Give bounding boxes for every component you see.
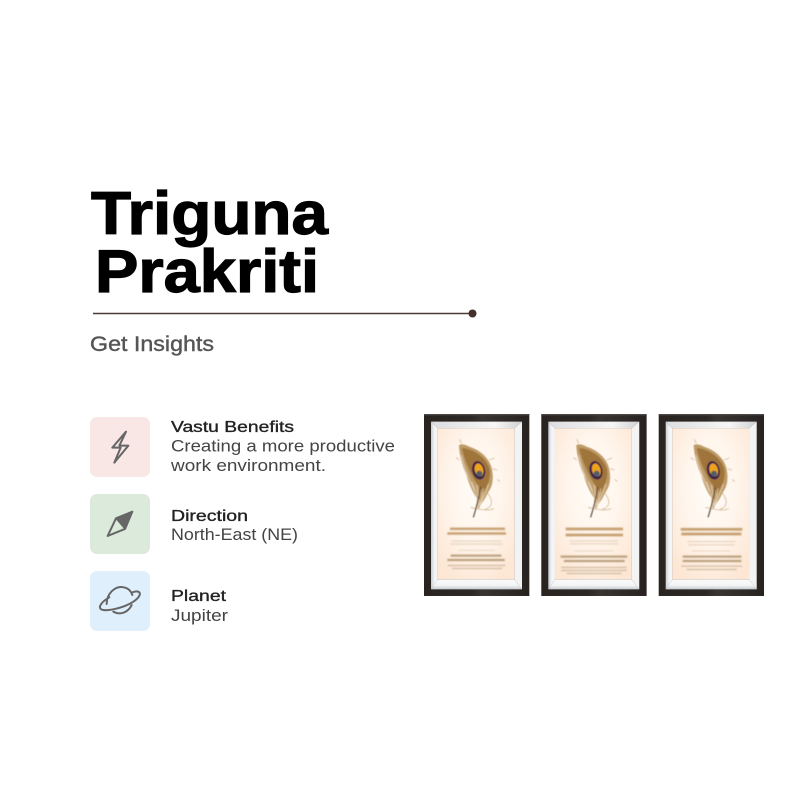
divider line with end dot xyxy=(93,310,476,318)
text: planet: Jupiter xyxy=(171,607,229,625)
text: direction: Direction xyxy=(171,508,248,525)
text: vastu benefits: Creating a more productive xyxy=(171,438,395,456)
text: vastu benefits: work environment. xyxy=(170,457,326,475)
title: Prakriti xyxy=(95,238,319,305)
subtitle: Get Insights xyxy=(90,333,214,356)
title: Triguna xyxy=(91,180,329,247)
item: planet xyxy=(90,571,229,631)
text: direction xyxy=(171,508,298,544)
icon: ringed planet xyxy=(90,571,150,631)
framed art 3 xyxy=(659,414,764,596)
framed art 1 xyxy=(424,414,529,596)
text: planet: Planet xyxy=(171,588,227,605)
icon: compass xyxy=(90,494,150,554)
framed art 2 xyxy=(541,414,647,596)
title xyxy=(91,180,329,305)
text: planet xyxy=(171,588,229,625)
icon: lightning bolt xyxy=(90,417,150,477)
text: vastu benefits: Vastu Benefits xyxy=(171,419,294,436)
item: direction xyxy=(90,494,298,554)
item: vastu benefits xyxy=(90,417,395,477)
text: vastu benefits xyxy=(170,419,395,475)
text: direction: North-East (NE) xyxy=(171,526,298,544)
